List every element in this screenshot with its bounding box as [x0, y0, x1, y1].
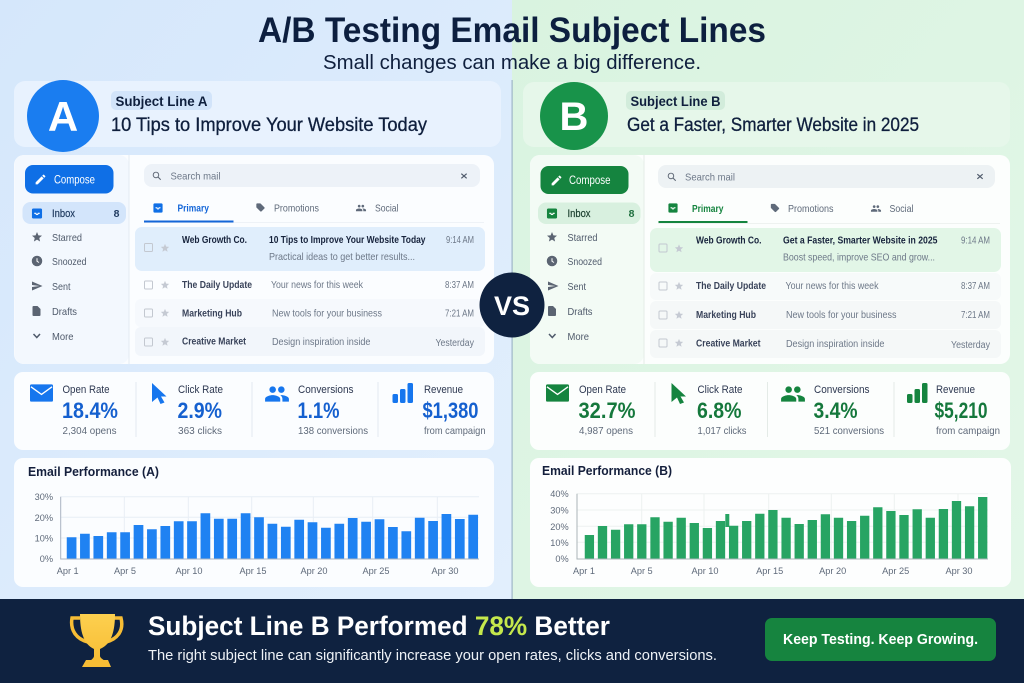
email row: The Daily Update B: Your news for this week [786, 281, 879, 292]
search bar A: Search mail [170, 171, 220, 183]
panel: metrics A [14, 372, 494, 450]
x axis labels A: Apr 30 [431, 566, 459, 576]
chart gridlines A [61, 497, 479, 559]
email row: Creative Market A [135, 327, 485, 356]
sidebar nav B: Inbox [568, 208, 591, 220]
sidebar nav A [22, 202, 126, 343]
sidebar nav A: Drafts [52, 306, 77, 318]
sidebar nav B: Sent [568, 281, 586, 293]
highlighted email row A [135, 227, 485, 271]
y axis labels A: 0% [40, 554, 53, 564]
panel: inbox B [530, 155, 1010, 364]
y axis labels B: 0% [555, 554, 569, 564]
button: keep testing [765, 618, 996, 661]
tabs B: Promotions [788, 203, 834, 215]
email row: Marketing Hub B: Marketing Hub [696, 310, 756, 321]
panel: subject line B [523, 82, 1010, 150]
metric: conversions B: 3.4% [814, 398, 858, 423]
email row: Creative Market A: Design inspiration inside [272, 337, 371, 348]
VS badge: VS [494, 291, 530, 321]
email row: The Daily Update A: 8:37 AM [445, 280, 474, 291]
sidebar nav B: More [568, 331, 589, 343]
tabs A: Promotions [274, 202, 319, 214]
metric: click rate A: Click Rate [178, 384, 223, 396]
x axis labels B: Apr 1 [573, 566, 595, 576]
badge B [540, 82, 608, 150]
metric: open rate B: 4,987 opens [579, 425, 633, 437]
metric: revenue B: from campaign [936, 425, 1000, 437]
compose button A [25, 165, 114, 194]
center divider [512, 80, 513, 600]
panel: chart B [530, 458, 1011, 587]
x axis labels B: Apr 25 [882, 566, 909, 576]
y axis labels B: 10% [550, 538, 569, 548]
subject text B: Get a Faster, Smarter Website in 2025 [627, 115, 919, 136]
search bar B [658, 165, 995, 188]
metric: revenue B: Revenue [936, 384, 975, 396]
search bar A [144, 164, 480, 187]
axes A [61, 497, 479, 559]
highlighted email row B: 9:14 AM [961, 236, 990, 246]
email row: The Daily Update A: The Daily Update [182, 280, 252, 291]
bar chart A [72, 513, 473, 559]
banner headline: Subject Line B Performed 78% Better [148, 611, 610, 641]
metric: revenue B [907, 383, 1000, 437]
email row: Marketing Hub A [135, 299, 485, 327]
chart gridlines B [577, 494, 988, 559]
y axis labels A [35, 492, 53, 564]
metric: revenue A: $1,380 [422, 398, 478, 423]
email row: The Daily Update A [135, 272, 485, 299]
metric: open rate A: 2,304 opens [62, 425, 116, 437]
email row: The Daily Update B [650, 273, 1001, 300]
metric: open rate A [30, 384, 118, 437]
y axis labels B: 30% [550, 506, 569, 516]
chart title A: Email Performance (A) [28, 465, 159, 479]
metric: open rate A: 18.4% [62, 398, 118, 423]
metric: conversions B: 521 conversions [814, 425, 884, 437]
tabs A: Social [375, 202, 398, 214]
subject text A: 10 Tips to Improve Your Website Today [111, 115, 427, 136]
y axis labels A: 20% [35, 513, 53, 523]
metric: conversions B [781, 384, 884, 437]
sidebar nav B: 8 [629, 208, 635, 220]
email row: Marketing Hub A: Marketing Hub [182, 308, 242, 320]
sidebar nav B [538, 202, 640, 343]
email row: Creative Market B: Creative Market [696, 338, 761, 350]
highlighted email row A: Practical ideas to get better results... [269, 252, 415, 263]
metric: click rate A [152, 383, 223, 437]
x axis labels A: Apr 25 [362, 566, 390, 576]
highlighted email row B: Get a Faster, Smarter Website in 2025 [783, 236, 938, 246]
metric: click rate B: 1,017 clicks [698, 425, 746, 437]
label pill B: Subject Line B [630, 94, 721, 109]
metric: open rate B: Open Rate [579, 384, 626, 396]
y axis labels A: 30% [35, 492, 53, 502]
metric: click rate B: Click Rate [698, 384, 742, 396]
metric: open rate A: Open Rate [62, 384, 110, 396]
tabs A: Primary [178, 202, 209, 214]
x axis labels A: Apr 15 [239, 566, 267, 576]
x axis labels B: Apr 15 [756, 566, 783, 576]
x axis labels B: Apr 10 [691, 566, 719, 576]
compose button A: Compose [54, 174, 95, 186]
panel: chart A [14, 458, 494, 587]
y axis labels B: 40% [550, 489, 569, 499]
email row: Marketing Hub A: New tools for your business [272, 308, 382, 320]
x axis labels A: Apr 10 [175, 566, 203, 576]
metric: click rate A: 363 clicks [178, 425, 222, 437]
y axis labels B: 20% [550, 522, 569, 532]
sidebar nav A: Starred [52, 232, 82, 244]
metric: revenue A: from campaign [424, 425, 486, 437]
highlighted email row B: Boost speed, improve SEO and grow... [783, 252, 935, 264]
badge A: A [48, 93, 78, 140]
subtitle: Small changes can make a big difference. [323, 52, 701, 74]
panel: metrics B [530, 372, 1010, 450]
email row: Creative Market A: Yesterday [436, 338, 474, 349]
footer banner [0, 599, 1024, 683]
highlighted email row A: Web Growth Co. [182, 235, 247, 246]
sidebar nav A: Snoozed [52, 256, 87, 268]
y axis labels B [550, 489, 569, 564]
highlighted email row B: Web Growth Co. [696, 236, 762, 246]
VS badge [480, 272, 544, 338]
button: keep testing: Keep Testing. Keep Growing. [783, 632, 978, 648]
metric: revenue B: $5,210 [934, 398, 988, 423]
email row: The Daily Update B: The Daily Update [696, 281, 766, 292]
panel: left background (variant A) [0, 0, 512, 600]
title: A/B Testing Email Subject Lines [258, 11, 766, 50]
panel: inbox A [14, 155, 494, 364]
x axis labels B: Apr 20 [819, 566, 846, 576]
metric: revenue A: Revenue [424, 384, 463, 396]
chart title B: Email Performance (B) [542, 464, 672, 478]
y axis labels A: 10% [35, 534, 53, 544]
sidebar nav B: Drafts [568, 306, 592, 318]
highlighted email row B [650, 228, 1001, 272]
sidebar nav B: Starred [568, 232, 598, 244]
search bar B: Search mail [685, 171, 735, 183]
email row: Creative Market A: Creative Market [182, 336, 247, 348]
icon: trophy [72, 614, 122, 667]
x axis labels A: Apr 20 [300, 566, 328, 576]
email row: Marketing Hub A: 7:21 AM [445, 308, 474, 320]
metric: open rate B [546, 384, 636, 437]
metric: click rate B: 6.8% [697, 398, 742, 423]
email row: Marketing Hub B: 7:21 AM [961, 310, 990, 321]
highlighted email row A: 10 Tips to Improve Your Website Today [269, 235, 426, 246]
tabs B: Primary [692, 203, 724, 215]
sidebar nav A: More [52, 331, 74, 343]
tabs B: Social [890, 203, 914, 215]
compose button B [540, 166, 628, 194]
email row: The Daily Update B: 8:37 AM [961, 281, 990, 292]
x axis labels B [573, 566, 973, 576]
metric: conversions A [265, 384, 368, 437]
badge B: B [560, 95, 588, 139]
email row: Creative Market B [650, 330, 1001, 358]
x axis labels A: Apr 1 [57, 566, 79, 576]
badge A [27, 80, 99, 152]
bar chart B [589, 497, 983, 559]
metric: open rate B: 32.7% [578, 398, 636, 423]
tabs B [658, 203, 1000, 224]
metric: revenue A [392, 383, 486, 437]
email row: The Daily Update A: Your news for this week [271, 280, 364, 291]
highlighted email row A: 9:14 AM [446, 235, 474, 246]
x axis labels B: Apr 30 [945, 566, 973, 576]
email row: Marketing Hub B: New tools for your business [786, 310, 896, 321]
x axis labels A [57, 566, 459, 576]
axes B [577, 494, 988, 559]
metric: conversions A: 138 conversions [298, 425, 368, 437]
metric: conversions A: Conversions [298, 384, 354, 396]
sidebar nav A: 8 [114, 208, 120, 220]
banner subtext: The right subject line can significantly increase your open rates, clicks and conversions. [148, 647, 717, 664]
metric: click rate A: 2.9% [178, 398, 222, 423]
sidebar nav A: Sent [52, 281, 71, 293]
panel: right background (variant B) [512, 0, 1024, 600]
x axis labels B: Apr 5 [631, 566, 653, 576]
label pill A: Subject Line A [116, 94, 208, 109]
panel: subject line A [14, 80, 501, 152]
sidebar nav A: Inbox [52, 208, 75, 220]
email row: Creative Market B: Design inspiration inside [786, 339, 885, 350]
metric: conversions A: 1.1% [298, 398, 340, 423]
email row: Creative Market B: Yesterday [951, 340, 990, 351]
metric: conversions B: Conversions [814, 384, 870, 396]
sidebar nav B: Snoozed [568, 256, 602, 268]
tabs A [144, 202, 484, 223]
email row: Marketing Hub B [650, 301, 1001, 329]
x axis labels A: Apr 5 [114, 566, 136, 576]
compose button B: Compose [569, 175, 610, 187]
metric: click rate B [672, 383, 746, 437]
